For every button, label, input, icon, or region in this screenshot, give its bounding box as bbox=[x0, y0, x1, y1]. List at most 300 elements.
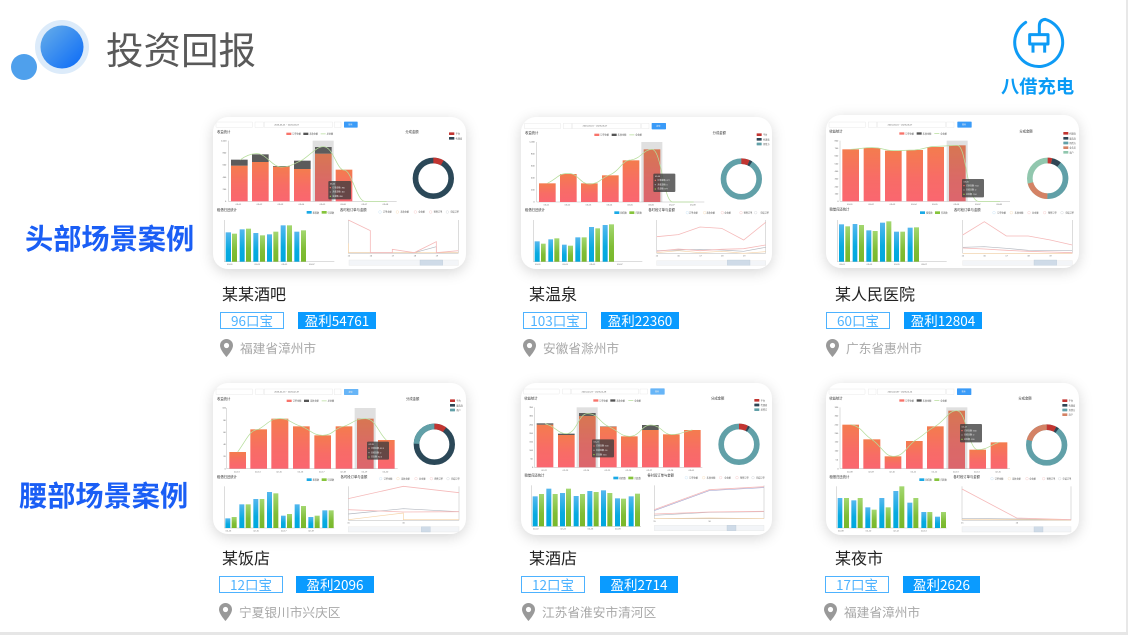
toolbar: 搜索 bbox=[348, 122, 352, 126]
revenue bar chart: 收益统计 bbox=[829, 129, 843, 134]
rental bar chart: 03-03 bbox=[562, 264, 569, 266]
rental bar chart: 租借归还统计 bbox=[525, 207, 546, 212]
revenue bar chart: 02-19 bbox=[362, 471, 368, 473]
revenue bar chart: 03-07 bbox=[362, 204, 368, 206]
revenue bar chart: 未收金额: 110 bbox=[332, 190, 346, 194]
hourly line chart: 17 bbox=[392, 256, 395, 258]
rental bar chart bbox=[524, 472, 642, 531]
panel: 某某酒吧 dashboard bbox=[208, 114, 472, 278]
rental bar chart bbox=[217, 474, 335, 532]
revenue bar chart: 订单金额: 744 bbox=[966, 183, 979, 187]
toolbar: 搜索 bbox=[349, 390, 353, 394]
rental bar chart: 02-10 bbox=[866, 530, 872, 532]
revenue bar chart: 收益统计 bbox=[524, 395, 538, 400]
donut chart: 场所方 bbox=[1069, 141, 1076, 145]
revenue bar chart: 未收金额 bbox=[309, 132, 319, 136]
revenue bar chart bbox=[525, 130, 704, 207]
heading: 头部场景案例: 头部场景案例 bbox=[25, 217, 194, 258]
revenue bar chart: 订单金额: 300 bbox=[596, 444, 609, 448]
rental bar chart: 03-07 bbox=[921, 264, 928, 266]
hourly line chart: 订单金额 bbox=[383, 210, 392, 214]
revenue bar chart: 03-06 bbox=[648, 205, 655, 207]
hourly line chart: 完结订单 bbox=[451, 476, 460, 480]
tag: 103口宝: 103口宝 bbox=[530, 310, 580, 330]
hourly line chart: 总金额 bbox=[1032, 210, 1039, 214]
revenue bar chart: 150 bbox=[529, 441, 534, 443]
donut chart: 分成金额 bbox=[1018, 395, 1032, 400]
toolbar: 2023-02-08 ~ 2023-02-14 bbox=[888, 391, 913, 393]
hourly line chart: 总金额 bbox=[724, 210, 732, 214]
revenue bar chart: 03-04 bbox=[607, 205, 613, 207]
revenue bar chart: 总金额 bbox=[940, 398, 948, 402]
hourly line chart: 订单金额 bbox=[384, 476, 393, 480]
donut chart: 平台 bbox=[1069, 399, 1073, 403]
revenue bar chart: 02-16 bbox=[298, 471, 304, 473]
revenue bar chart: 400 bbox=[531, 178, 535, 180]
revenue bar chart: 未收金额: 16 bbox=[596, 448, 608, 452]
revenue bar chart: 03-01 bbox=[689, 470, 695, 472]
revenue bar chart: 800 bbox=[223, 153, 227, 155]
donut chart: 代理商 bbox=[761, 403, 768, 407]
page edge: bottom bbox=[0, 632, 1128, 635]
location: 福建省漳州市: 福建省漳州市 bbox=[240, 338, 316, 357]
revenue bar chart: 未收金额 bbox=[616, 398, 626, 402]
revenue bar chart: 02-25 bbox=[605, 470, 611, 472]
rental bar chart: 归还数 bbox=[941, 211, 948, 215]
rental bar chart: 归还数 bbox=[328, 210, 335, 214]
revenue bar chart: 订单金额 bbox=[599, 398, 609, 402]
location: 福建省漳州市: 福建省漳州市 bbox=[844, 602, 920, 621]
tag: 盈利2714: 盈利2714 bbox=[610, 574, 667, 594]
hourly line chart: 17 bbox=[1005, 256, 1009, 258]
donut chart: 平台 bbox=[761, 398, 765, 402]
hourly line chart: 总金额 bbox=[419, 476, 426, 480]
revenue bar chart: 50 bbox=[530, 458, 534, 460]
hourly line chart bbox=[647, 473, 765, 531]
revenue bar chart: 总金额: 744 bbox=[966, 192, 977, 196]
toolbar: 2023-03-01 ~ 2023-03-07 bbox=[888, 124, 913, 126]
donut chart: 商户 bbox=[456, 408, 461, 412]
donut chart: 分成金额 bbox=[1019, 129, 1033, 134]
hourly line chart: 15 bbox=[656, 256, 659, 258]
location: 广东省惠州市: 广东省惠州市 bbox=[846, 338, 922, 357]
hourly line chart bbox=[648, 207, 770, 265]
revenue bar chart: 总金额: 316 bbox=[596, 452, 607, 456]
revenue bar chart: 未收金额: 0 bbox=[964, 433, 975, 437]
revenue bar chart: 02-13 bbox=[234, 471, 240, 473]
hourly line chart: 预售订单 bbox=[1048, 210, 1057, 214]
revenue bar chart: 250 bbox=[529, 424, 534, 426]
revenue bar chart: 0 bbox=[533, 202, 535, 204]
tag: 盈利2096 bbox=[296, 576, 374, 593]
tag: 盈利2714 bbox=[600, 576, 678, 593]
rental bar chart: 03-07 bbox=[309, 264, 315, 266]
rental bar chart: 租借数 bbox=[619, 476, 627, 480]
toolbar: 搜索 bbox=[655, 389, 659, 393]
revenue bar chart: 订单金额 bbox=[905, 131, 915, 135]
revenue bar chart: 未收金额: 0 bbox=[657, 182, 668, 186]
toolbar: 2023-02-23 ~ 2023-02-28 bbox=[582, 391, 607, 393]
hourly line chart: 未收金额 bbox=[706, 210, 716, 214]
revenue bar chart: 600 bbox=[531, 166, 535, 168]
hourly line chart: 订单金额 bbox=[689, 210, 698, 214]
revenue bar chart bbox=[217, 129, 397, 206]
revenue bar chart: 400 bbox=[223, 177, 227, 179]
hourly line chart: 15 bbox=[961, 523, 964, 525]
hourly line chart: 总金额 bbox=[1029, 476, 1037, 480]
revenue bar chart: 500 bbox=[835, 163, 839, 165]
revenue bar chart: 02-23 bbox=[563, 470, 569, 472]
revenue bar chart: 02-10 bbox=[889, 471, 896, 473]
donut chart: 平台 bbox=[456, 399, 461, 403]
rental bar chart bbox=[829, 207, 948, 266]
revenue bar chart: 03-03 bbox=[586, 205, 592, 207]
revenue bar chart: 03-07 bbox=[669, 205, 675, 207]
hourly line chart: 预售订单 bbox=[1047, 476, 1056, 480]
hourly line chart: 19 bbox=[1049, 256, 1053, 258]
rental bar chart: 归还数 bbox=[634, 476, 642, 480]
hourly line chart: 各时段订单与金额 bbox=[647, 473, 675, 478]
hourly line chart: 各时段订单与金额 bbox=[648, 207, 676, 212]
hourly line chart: 完结订单 bbox=[1063, 476, 1072, 480]
toolbar: 搜索 bbox=[656, 124, 660, 128]
donut chart: 服务商 bbox=[456, 403, 464, 407]
rental bar chart: 租借数 bbox=[313, 210, 320, 214]
toolbar bbox=[829, 122, 972, 128]
revenue bar chart: 0 bbox=[225, 468, 227, 470]
revenue bar chart: 100 bbox=[835, 194, 839, 196]
donut chart: 代理商 bbox=[456, 136, 463, 140]
revenue bar chart: 600 bbox=[223, 165, 227, 167]
icon: header bubbles bbox=[11, 20, 89, 80]
hourly line chart: 15 bbox=[348, 256, 351, 258]
title: 投资回报 bbox=[106, 20, 256, 75]
donut chart bbox=[1018, 395, 1076, 463]
revenue bar chart: 订单金额 bbox=[905, 398, 915, 402]
revenue bar chart: 03-08 bbox=[383, 204, 389, 206]
revenue bar chart: 03-01 bbox=[236, 204, 242, 206]
toolbar bbox=[216, 122, 358, 128]
hourly line chart: 预售订单 bbox=[434, 476, 444, 480]
revenue bar chart: 总金额 bbox=[328, 399, 335, 403]
donut chart: 场所方 bbox=[761, 408, 767, 412]
rental bar chart: 02-26 bbox=[588, 529, 594, 531]
tag: 12口宝: 12口宝 bbox=[532, 574, 574, 594]
hourly line chart: 16 bbox=[370, 256, 373, 258]
location: 安徽省滁州市: 安徽省滁州市 bbox=[543, 338, 619, 357]
revenue bar chart: 未收金额 bbox=[923, 131, 932, 135]
revenue bar chart: 02-22 bbox=[541, 470, 548, 472]
rental bar chart bbox=[217, 207, 335, 266]
label: 某温泉: 某温泉 bbox=[529, 281, 577, 305]
revenue bar chart: 02-11 bbox=[911, 471, 917, 473]
revenue bar chart: 未收金额: 0 bbox=[371, 450, 382, 454]
revenue bar chart: 03-05 bbox=[320, 204, 326, 206]
donut chart bbox=[711, 395, 768, 462]
location: 宁夏银川市兴庆区: 宁夏银川市兴庆区 bbox=[239, 602, 340, 621]
revenue bar chart: 03-01 bbox=[544, 205, 550, 207]
toolbar: 2023-03-01 ~ 2023-03-07 bbox=[274, 124, 300, 126]
hourly line chart: 未收金额 bbox=[401, 476, 410, 480]
revenue bar chart: 03-06 bbox=[954, 204, 960, 206]
revenue bar chart: 0 bbox=[837, 468, 839, 470]
revenue bar chart: 300 bbox=[835, 179, 839, 181]
page edge: right bbox=[1126, 0, 1128, 635]
rental bar chart: 归还数 bbox=[635, 211, 643, 215]
label: 某饭店: 某饭店 bbox=[222, 545, 270, 569]
rental bar chart: 02-19 bbox=[308, 530, 315, 532]
hourly line chart: 16 bbox=[677, 256, 681, 258]
revenue bar chart: 订单金额: 330 bbox=[964, 428, 977, 432]
revenue bar chart: 订单金额 bbox=[600, 133, 610, 137]
revenue bar chart: 03-08 bbox=[690, 205, 696, 207]
hourly line chart: 完结订单 bbox=[450, 210, 460, 214]
revenue bar chart: 800 bbox=[531, 154, 535, 156]
revenue bar chart: 总金额 bbox=[940, 131, 948, 135]
revenue bar chart: 20 bbox=[223, 456, 227, 458]
hourly line chart: 16 bbox=[1016, 523, 1019, 525]
revenue bar chart: 200 bbox=[835, 186, 839, 188]
hourly line chart: 完结订单 bbox=[756, 475, 765, 479]
rental bar chart: 02-15 bbox=[253, 530, 260, 532]
rental bar chart: 租借数 bbox=[926, 211, 933, 215]
hourly line chart: 16 bbox=[708, 521, 712, 523]
tag: 17口宝 bbox=[825, 576, 889, 593]
location: 江苏省淮安市清河区: 江苏省淮安市清河区 bbox=[542, 602, 656, 621]
revenue bar chart: 03-03 bbox=[890, 204, 896, 206]
revenue bar chart: 02-08 bbox=[847, 471, 853, 473]
panel: 某酒店 dashboard bbox=[516, 380, 778, 544]
toolbar: 搜索 bbox=[962, 122, 966, 126]
revenue bar chart: 100 bbox=[222, 408, 227, 410]
donut chart: 分成金额 bbox=[406, 396, 420, 401]
revenue bar chart: 02-17 bbox=[319, 471, 325, 473]
hourly line chart bbox=[954, 207, 1075, 265]
rental bar chart: 02-12 bbox=[893, 530, 900, 532]
revenue bar chart: 总金额 bbox=[635, 133, 643, 137]
rental bar chart: 租借归还统计 bbox=[829, 207, 850, 212]
donut chart bbox=[406, 396, 464, 462]
revenue bar chart: 200 bbox=[529, 433, 534, 435]
revenue bar chart: 收益统计 bbox=[829, 395, 843, 400]
revenue bar chart: 02-13 bbox=[962, 426, 968, 428]
label: 某夜市: 某夜市 bbox=[835, 545, 883, 569]
revenue bar chart: 03-03 bbox=[278, 204, 284, 206]
logo: 八借充电: 八借充电 bbox=[1001, 73, 1074, 99]
revenue bar chart: 02-15 bbox=[995, 471, 1002, 473]
hourly line chart: 总金额 bbox=[724, 475, 732, 479]
donut chart: 业务员 bbox=[1069, 146, 1076, 150]
revenue bar chart: 350 bbox=[529, 407, 534, 409]
revenue bar chart: 300 bbox=[529, 416, 534, 418]
panel: 某人民医院 dashboard bbox=[820, 112, 1084, 276]
donut chart: 商户 bbox=[1069, 413, 1073, 417]
donut chart: 代理商 bbox=[1069, 403, 1076, 407]
rental bar chart: 租借归还统计 bbox=[524, 472, 545, 477]
revenue bar chart: 订单金额: 877 bbox=[657, 178, 671, 182]
hourly line chart: 18 bbox=[1027, 256, 1031, 258]
revenue bar chart: 02-24 bbox=[594, 442, 600, 444]
rental bar chart: 租借数 bbox=[620, 211, 628, 215]
rental bar chart: 03-03 bbox=[254, 264, 261, 266]
revenue bar chart: 0 bbox=[532, 467, 534, 469]
hourly line chart: 各时段订单与金额 bbox=[954, 207, 981, 212]
revenue bar chart: 02-13 bbox=[953, 471, 959, 473]
revenue bar chart: 02-24 bbox=[584, 470, 590, 472]
rental bar chart: 03-03 bbox=[867, 264, 873, 266]
rental bar chart: 03-05 bbox=[894, 264, 900, 266]
revenue bar chart: 总金额 bbox=[634, 398, 642, 402]
revenue bar chart: 200 bbox=[531, 190, 535, 192]
hourly line chart bbox=[340, 207, 460, 265]
label: 某某酒吧: 某某酒吧 bbox=[222, 281, 286, 305]
hourly line chart: 18 bbox=[414, 256, 417, 258]
revenue bar chart: 03-08 bbox=[996, 204, 1003, 206]
rental bar chart: 租借数 bbox=[925, 478, 933, 482]
donut chart: 场所方 bbox=[763, 142, 769, 146]
label: 某人民医院: 某人民医院 bbox=[835, 281, 915, 305]
revenue bar chart: 1,000 bbox=[221, 140, 227, 142]
revenue bar chart: 02-12 bbox=[932, 471, 938, 473]
donut chart bbox=[713, 130, 770, 197]
toolbar bbox=[524, 123, 666, 129]
rental bar chart: 02-22 bbox=[533, 529, 539, 531]
revenue bar chart: 400 bbox=[835, 171, 839, 173]
tag: 盈利12804: 盈利12804 bbox=[911, 310, 975, 330]
tag: 96口宝: 96口宝 bbox=[231, 310, 273, 330]
revenue bar chart: 03-02 bbox=[868, 204, 875, 206]
rental bar chart: 02-24 bbox=[560, 529, 567, 531]
revenue bar chart: 02-15 bbox=[276, 471, 283, 473]
rental bar chart: 02-28 bbox=[615, 529, 621, 531]
hourly line chart: 15 bbox=[962, 256, 965, 258]
toolbar bbox=[216, 389, 358, 395]
donut chart bbox=[405, 129, 463, 196]
hourly line chart: 未收金额 bbox=[707, 475, 716, 479]
tag: 96口宝 bbox=[220, 312, 284, 329]
rental bar chart: 租借归还统计 bbox=[217, 474, 238, 479]
rental bar chart: 03-07 bbox=[617, 264, 623, 266]
rental bar chart: 租借归还统计 bbox=[217, 207, 238, 212]
panel: 某夜市 dashboard bbox=[820, 380, 1084, 544]
label: 某酒店: 某酒店 bbox=[529, 545, 577, 569]
toolbar bbox=[829, 388, 971, 395]
revenue bar chart bbox=[829, 395, 1010, 473]
revenue bar chart: 600 bbox=[835, 156, 839, 158]
hourly line chart: 15 bbox=[653, 521, 657, 523]
revenue bar chart: 未收金额 bbox=[310, 399, 319, 403]
revenue bar chart: 总金额: 890 bbox=[332, 194, 344, 198]
toolbar bbox=[523, 388, 665, 395]
rental bar chart: 归还数 bbox=[328, 478, 335, 482]
hourly line chart bbox=[953, 474, 1072, 532]
revenue bar chart: 200 bbox=[223, 189, 227, 191]
revenue bar chart: 总金额: 877 bbox=[657, 187, 669, 191]
rental bar chart: 02-14 bbox=[921, 530, 927, 532]
revenue bar chart: 50 bbox=[836, 459, 839, 461]
revenue bar chart: 总金额: 82.5 bbox=[371, 455, 383, 459]
revenue bar chart: 03-05 bbox=[330, 183, 336, 185]
revenue bar chart: 03-05 bbox=[627, 205, 634, 207]
hourly line chart: 16 bbox=[983, 256, 987, 258]
donut chart: 服务商 bbox=[1069, 136, 1077, 140]
hourly line chart: 各时段订单与金额 bbox=[340, 207, 367, 212]
donut chart: 分成金额 bbox=[711, 395, 725, 400]
revenue bar chart: 100 bbox=[835, 451, 839, 453]
revenue bar chart: 100 bbox=[529, 450, 534, 452]
rental bar chart bbox=[525, 207, 643, 266]
revenue bar chart: 未收金额 bbox=[923, 398, 932, 402]
revenue bar chart: 03-06 bbox=[964, 181, 970, 183]
revenue bar chart: 02-27 bbox=[647, 470, 653, 472]
hourly line chart: 预售订单 bbox=[740, 475, 749, 479]
toolbar: 搜索 bbox=[962, 390, 966, 394]
revenue bar chart: 03-04 bbox=[911, 204, 917, 206]
tag: 盈利54761: 盈利54761 bbox=[305, 310, 369, 330]
donut chart: 分成金额 bbox=[713, 130, 727, 135]
hourly line chart: 订单金额 bbox=[995, 476, 1004, 480]
hourly line chart: 预售订单 bbox=[744, 210, 753, 214]
revenue bar chart: 未收金额: 0 bbox=[966, 188, 977, 192]
revenue bar chart: 03-06 bbox=[340, 204, 347, 206]
tag: 盈利22360: 盈利22360 bbox=[608, 310, 672, 330]
tag: 盈利2096: 盈利2096 bbox=[306, 574, 363, 594]
revenue bar chart: 350 bbox=[835, 407, 839, 409]
revenue bar chart bbox=[829, 129, 1010, 206]
revenue bar chart: 200 bbox=[835, 433, 839, 435]
revenue bar chart: 02-14 bbox=[255, 471, 261, 473]
hourly line chart: 15 bbox=[347, 523, 351, 525]
hourly line chart: 17 bbox=[699, 256, 703, 258]
hourly line chart: 16 bbox=[402, 523, 406, 525]
rental bar chart: 03-01 bbox=[227, 264, 233, 266]
donut chart: 分成金额 bbox=[405, 129, 419, 134]
revenue bar chart: 02-18 bbox=[340, 471, 347, 473]
donut chart bbox=[1019, 129, 1077, 196]
hourly line chart: 未收金额 bbox=[1015, 210, 1024, 214]
logo: 八借充电 bbox=[1001, 18, 1074, 99]
donut chart: 代理商 bbox=[763, 137, 770, 141]
rental bar chart: 03-05 bbox=[282, 264, 288, 266]
hourly line chart: 19 bbox=[436, 256, 439, 258]
revenue bar chart: 1,000 bbox=[529, 142, 536, 144]
donut chart: 平台 bbox=[456, 132, 460, 136]
revenue bar chart: 150 bbox=[835, 442, 839, 444]
tag: 103口宝 bbox=[523, 312, 587, 329]
rental bar chart bbox=[829, 474, 948, 532]
rental bar chart: 租借数 bbox=[313, 478, 320, 482]
hourly line chart: 总金额 bbox=[418, 210, 426, 214]
revenue bar chart: 02-28 bbox=[668, 470, 674, 472]
revenue bar chart: 03-02 bbox=[257, 204, 263, 206]
revenue bar chart: 03-05 bbox=[932, 204, 938, 206]
revenue bar chart: 02-26 bbox=[626, 470, 632, 472]
revenue bar chart: 300 bbox=[835, 416, 839, 418]
donut chart: 平台 bbox=[763, 133, 767, 137]
revenue bar chart: 收益统计 bbox=[217, 396, 231, 401]
tag: 60口宝: 60口宝 bbox=[837, 310, 879, 330]
revenue bar chart: 03-06 bbox=[655, 176, 661, 178]
revenue bar chart: 03-07 bbox=[975, 204, 981, 206]
hourly line chart: 各时段订单与金额 bbox=[341, 474, 368, 479]
hourly line chart: 18 bbox=[721, 256, 724, 258]
revenue bar chart: 700 bbox=[835, 148, 839, 150]
revenue bar chart: 800 bbox=[835, 140, 839, 142]
revenue bar chart: 未收金额 bbox=[618, 133, 627, 137]
rental bar chart: 03-01 bbox=[535, 264, 541, 266]
revenue bar chart: 订单金额 bbox=[293, 399, 302, 403]
tag: 12口宝 bbox=[521, 576, 585, 593]
